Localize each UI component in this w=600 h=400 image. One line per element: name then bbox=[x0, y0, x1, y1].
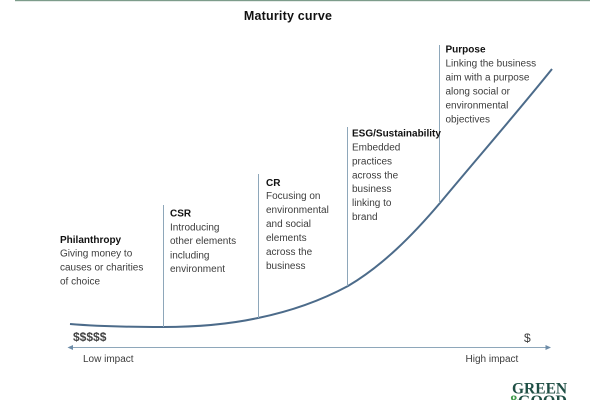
stage: Purpose: Purpose bbox=[446, 44, 486, 56]
stage: ESG/Sustainability bbox=[352, 128, 441, 223]
stage: Philanthropy: causes or charities bbox=[60, 262, 143, 274]
stage: Purpose bbox=[446, 44, 536, 126]
stage: Purpose: along social or bbox=[446, 86, 511, 98]
stage: CSR: Introducing bbox=[170, 222, 219, 234]
stage: CSR bbox=[170, 208, 236, 275]
stage: CR: and social bbox=[266, 219, 311, 230]
stage: CR: environmental bbox=[266, 205, 329, 216]
axis label: low impact: Low impact bbox=[83, 354, 134, 365]
axis label: high impact: High impact bbox=[466, 354, 519, 365]
stage: CR: across the bbox=[266, 247, 313, 258]
stage: CR: business bbox=[266, 261, 305, 272]
stage: Philanthropy bbox=[60, 235, 143, 288]
stage: Purpose: objectives bbox=[446, 114, 490, 126]
stage: CR bbox=[266, 178, 329, 272]
stage: CR: elements bbox=[266, 233, 307, 244]
stage: Purpose: aim with a purpose bbox=[446, 72, 530, 84]
cost label: high spend: $$$$$ bbox=[73, 330, 107, 344]
stage: ESG/Sustainability: Embedded bbox=[352, 142, 400, 154]
stage: ESG/Sustainability: brand bbox=[352, 212, 378, 223]
stage: ESG/Sustainability: practices bbox=[352, 156, 392, 168]
stage: ESG/Sustainability: ESG/Sustainability bbox=[352, 128, 441, 140]
impact axis arrow bbox=[68, 345, 551, 350]
stage: Philanthropy: Philanthropy bbox=[60, 235, 122, 246]
logo: Green & Good: GREEN bbox=[512, 380, 567, 398]
stage marker lines bbox=[164, 45, 440, 327]
stage: ESG/Sustainability: business bbox=[352, 184, 391, 195]
stage: CSR: other elements bbox=[170, 236, 236, 247]
stage: CSR: including bbox=[170, 250, 209, 262]
stage: Purpose: environmental bbox=[446, 100, 508, 112]
maturity curve line bbox=[70, 69, 552, 327]
stage: ESG/Sustainability: across the bbox=[352, 170, 399, 182]
cost label: low spend: $ bbox=[524, 331, 531, 345]
stage: Philanthropy: of choice bbox=[60, 276, 100, 288]
stage: CR: CR bbox=[266, 178, 281, 189]
stage: CSR: environment bbox=[170, 264, 225, 275]
stage: Philanthropy: Giving money to bbox=[60, 248, 133, 260]
stage: CSR: CSR bbox=[170, 208, 192, 220]
stage: Purpose: Linking the business bbox=[446, 58, 536, 70]
stage: CR: Focusing on bbox=[266, 191, 320, 202]
title: Maturity curve bbox=[244, 9, 332, 23]
stage: ESG/Sustainability: linking to bbox=[352, 198, 392, 209]
